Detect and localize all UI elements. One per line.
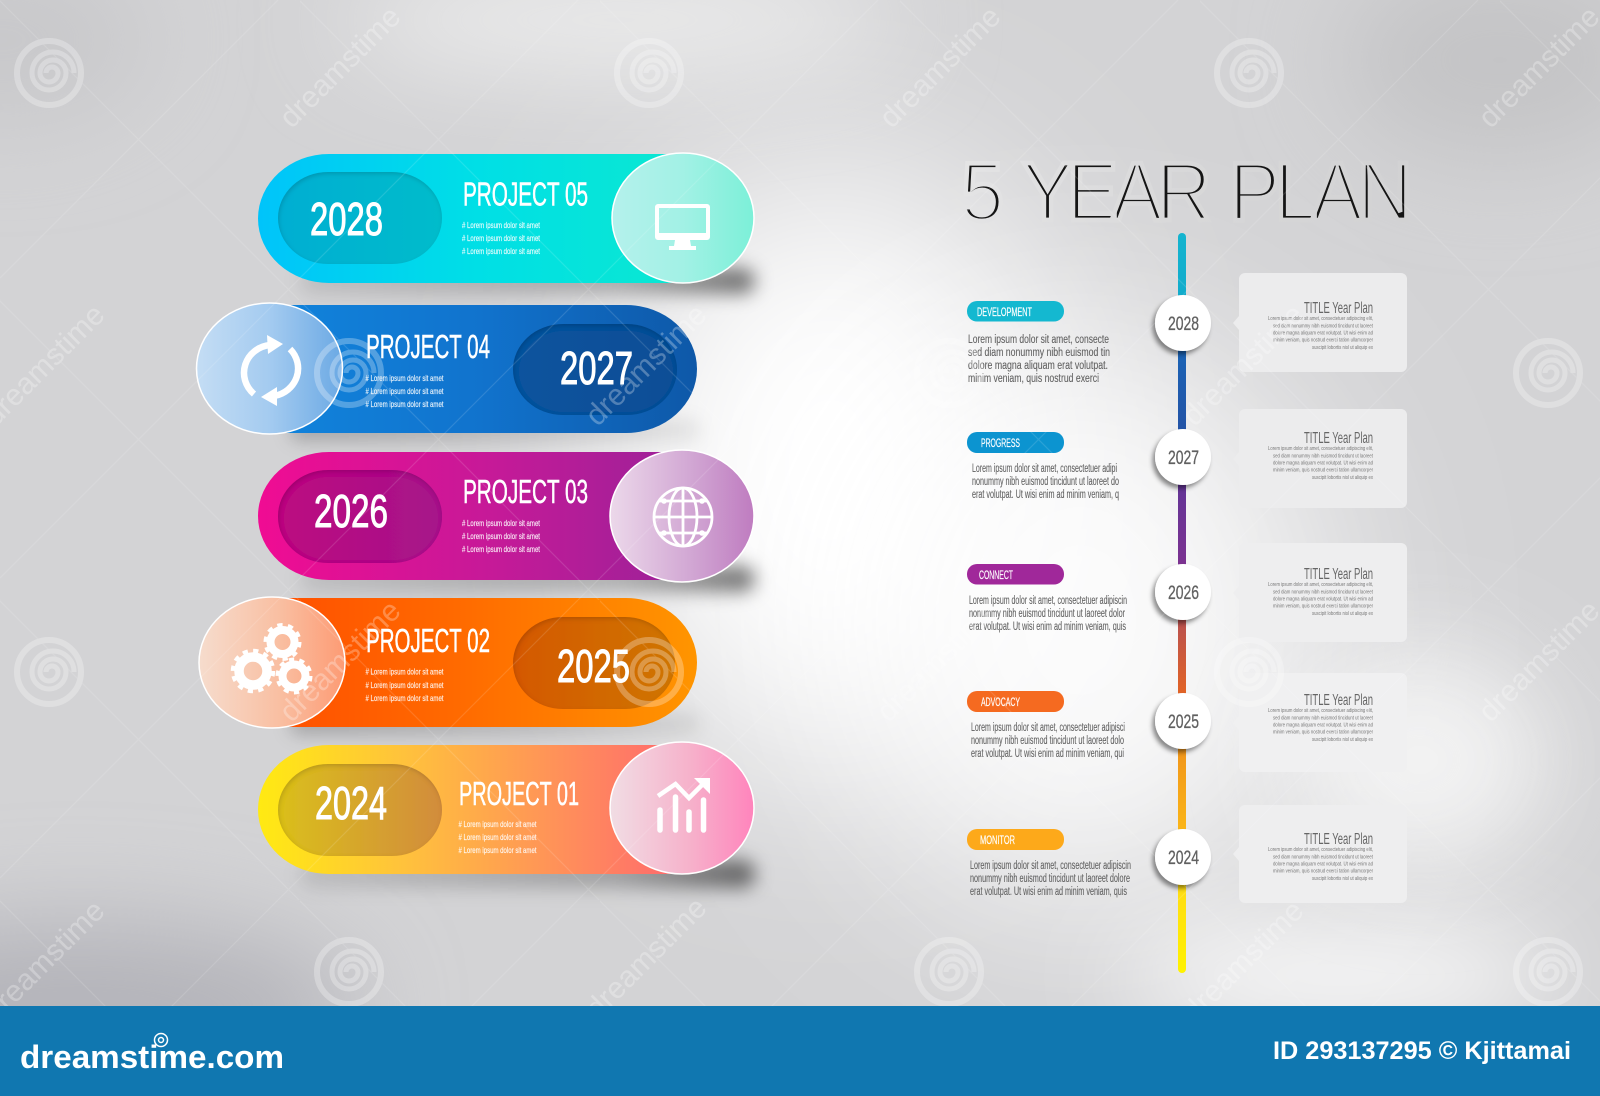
panel: project 01, 2024 <box>258 742 754 874</box>
year 2028: 2028 <box>310 193 383 245</box>
heading project 02: PROJECT 02 <box>366 622 490 659</box>
bullet list: # Lorem ipsum dolor sit amet <box>462 246 540 256</box>
block: progress: erat volutpat. Ut wisi enim ad minim veniam, q <box>972 489 1119 501</box>
block: progress <box>967 432 1119 501</box>
note box 2028: dolore magna aliquam erat volutpat. Ut wisi enim ad <box>1273 330 1373 336</box>
panel: project 02, 2025 <box>199 597 697 728</box>
title <box>961 145 1407 238</box>
note box 2024: suscipit lobortis nisl ut aliquip ex <box>1312 876 1373 882</box>
note box 2026: TITLE Year Plan <box>1304 566 1373 583</box>
bullet list: # Lorem ipsum dolor sit amet <box>366 666 444 676</box>
block: advocacy: Lorem ipsum dolor sit amet, consectetuer adipisci <box>971 722 1125 734</box>
block: connect: Lorem ipsum dolor sit amet, consectetuer adipiscin <box>969 595 1127 607</box>
note box 2027: sed diam nonummy nibh euismod tincidunt ut laoreet <box>1273 453 1373 459</box>
watermark overlay: dreamstime <box>870 594 1004 728</box>
block: monitor <box>967 829 1131 898</box>
block: progress: nonummy nibh euismod tincidunt ut laoreet do <box>972 476 1119 488</box>
note box 2026 <box>1233 543 1407 642</box>
note box 2024: TITLE Year Plan <box>1304 831 1373 848</box>
note box 2025 <box>1233 673 1407 772</box>
note box 2026: sed diam nonummy nibh euismod tincidunt ut laoreet <box>1273 589 1373 595</box>
note box 2025: sed diam nonummy nibh euismod tincidunt ut laoreet <box>1273 715 1373 721</box>
block: connect: CONNECT <box>979 570 1013 582</box>
note box 2025: dolore magna aliquam erat volutpat. Ut wisi enim ad <box>1273 722 1373 728</box>
heading project 05: PROJECT 05 <box>463 176 588 212</box>
note box 2026: dolore magna aliquam erat volutpat. Ut wisi enim ad <box>1273 596 1373 602</box>
note box 2025: Lorem ipsum dolor sit amet, consectetuer adipiscing elit, <box>1268 708 1373 714</box>
block: development: Lorem ipsum dolor sit amet, consecte <box>968 334 1109 346</box>
bullet list <box>366 666 444 703</box>
bullet list: # Lorem ipsum dolor sit amet <box>366 693 444 703</box>
block: connect: nonummy nibh euismod tincidunt ut laoreet dolor <box>969 608 1125 620</box>
note box 2028: minim veniam, quis nostrud exerci tation ullamcorper <box>1273 338 1373 344</box>
watermark overlay: dreamstime <box>1176 894 1310 1028</box>
timeline node 2027: 2027 <box>1168 448 1199 469</box>
watermark overlay: dreamstime <box>873 0 1007 134</box>
note box 2028 <box>1233 273 1407 372</box>
year 2025: 2025 <box>557 640 630 692</box>
bullet list: # Lorem ipsum dolor sit amet <box>366 373 444 383</box>
timeline node 2027 <box>1155 429 1211 485</box>
glass circle <box>196 303 342 434</box>
block: advocacy: nonummy nibh euismod tincidunt ut laoreet dolo <box>971 735 1124 747</box>
timeline node 2026 <box>1155 564 1211 620</box>
watermark overlay: dreamstime <box>579 298 713 432</box>
bullet list: # Lorem ipsum dolor sit amet <box>366 399 444 409</box>
note box 2027: minim veniam, quis nostrud exerci tation ullamcorper <box>1273 468 1373 474</box>
bullet list: # Lorem ipsum dolor sit amet <box>366 680 444 690</box>
heading project 03: PROJECT 03 <box>463 473 588 510</box>
bullet list: # Lorem ipsum dolor sit amet <box>458 819 537 829</box>
note box 2026: Lorem ipsum dolor sit amet, consectetuer adipiscing elit, <box>1268 582 1373 588</box>
note box 2024: dolore magna aliquam erat volutpat. Ut wisi enim ad <box>1273 862 1373 868</box>
year 2026: 2026 <box>314 485 388 537</box>
note box 2028: TITLE Year Plan <box>1304 300 1373 317</box>
panel: project 03, 2026 <box>258 450 754 582</box>
watermark overlay: dreamstime <box>273 0 407 134</box>
icon: globe <box>654 488 712 546</box>
block: development: DEVELOPMENT <box>977 307 1032 319</box>
note box 2027: suscipit lobortis nisl ut aliquip ex <box>1312 475 1373 481</box>
panel: project 04, 2027 <box>196 303 697 434</box>
note box 2025: TITLE Year Plan <box>1304 692 1373 709</box>
icon: sync arrows <box>244 335 298 406</box>
bullet list: # Lorem ipsum dolor sit amet <box>462 220 540 230</box>
icon: gears <box>233 625 310 692</box>
bullet list: # Lorem ipsum dolor sit amet <box>458 845 537 855</box>
block: monitor: nonummy nibh euismod tincidunt ut laoreet dolore <box>970 873 1130 885</box>
title: 5 <box>961 145 1004 238</box>
note box 2026: minim veniam, quis nostrud exerci tation ullamcorper <box>1273 604 1373 610</box>
heading project 01: PROJECT 01 <box>459 775 579 812</box>
bullet list <box>462 220 540 256</box>
title: YEAR <box>1022 145 1209 238</box>
card shadows <box>290 268 755 888</box>
timeline node 2028: 2028 <box>1168 314 1199 335</box>
block: advocacy: erat volutpat. Ut wisi enim ad minim veniam, qui <box>971 748 1124 760</box>
glass circle <box>610 742 754 874</box>
bullet list: # Lorem ipsum dolor sit amet <box>462 518 540 528</box>
note box 2027: dolore magna aliquam erat volutpat. Ut wisi enim ad <box>1273 460 1373 466</box>
note box 2028: Lorem ipsum dolor sit amet, consectetuer adipiscing elit, <box>1268 316 1373 322</box>
glass circle <box>199 597 345 728</box>
block: progress: PROGRESS <box>981 438 1020 450</box>
note box 2027: Lorem ipsum dolor sit amet, consectetuer adipiscing elit, <box>1268 446 1373 452</box>
block: connect: erat volutpat. Ut wisi enim ad minim veniam, quis <box>969 621 1126 633</box>
timeline node 2028 <box>1155 295 1211 351</box>
bullet list: # Lorem ipsum dolor sit amet <box>366 386 444 396</box>
heading project 04: PROJECT 04 <box>366 328 490 365</box>
icon: brand spiral <box>154 1034 168 1046</box>
timeline node 2026: 2026 <box>1168 583 1199 604</box>
note box 2025: suscipit lobortis nisl ut aliquip ex <box>1312 737 1373 743</box>
block: development: dolore magna aliquam erat volutpat. <box>968 360 1108 372</box>
timeline node 2025 <box>1155 693 1211 749</box>
image id credit: ID 293137295 © Kjittamai <box>1273 1037 1571 1065</box>
note box 2028: suscipit lobortis nisl ut aliquip ex <box>1312 345 1373 351</box>
title: PLAN <box>1229 145 1407 238</box>
note box 2024: Lorem ipsum dolor sit amet, consectetuer adipiscing elit, <box>1268 847 1373 853</box>
icon: growth chart <box>658 778 710 830</box>
year 2027: 2027 <box>560 342 633 394</box>
glass circle <box>610 450 754 582</box>
bullet list: # Lorem ipsum dolor sit amet <box>458 832 537 842</box>
bullet list: # Lorem ipsum dolor sit amet <box>462 233 540 243</box>
block: connect <box>967 564 1127 633</box>
bullet list <box>458 819 537 855</box>
panel: project 05, 2028 <box>258 153 754 283</box>
footer banner <box>0 1006 1600 1096</box>
block: advocacy: ADVOCACY <box>981 697 1020 709</box>
bullet list: # Lorem ipsum dolor sit amet <box>462 544 540 554</box>
bullet list <box>462 518 540 554</box>
note box 2024: sed diam nonummy nibh euismod tincidunt ut laoreet <box>1273 854 1373 860</box>
watermark overlay: dreamstime <box>579 891 713 1025</box>
block: progress: Lorem ipsum dolor sit amet, consectetuer adipi <box>972 463 1117 475</box>
block: monitor: erat volutpat. Ut wisi enim ad minim veniam, quis <box>970 886 1127 898</box>
timeline node 2024 <box>1155 829 1211 885</box>
note box 2026: suscipit lobortis nisl ut aliquip ex <box>1312 611 1373 617</box>
icon: monitor <box>655 204 710 250</box>
block: development: sed diam nonummy nibh euismod tin <box>968 347 1110 359</box>
glass circle <box>612 153 754 283</box>
timeline bar <box>1178 233 1186 973</box>
brand wordmark: dreamstime.com <box>20 1039 284 1075</box>
block: development <box>967 301 1110 385</box>
bullet list <box>366 373 444 409</box>
note box 2024: minim veniam, quis nostrud exerci tation ullamcorper <box>1273 869 1373 875</box>
watermark overlay: dreamstime <box>273 594 407 728</box>
note box 2028: sed diam nonummy nibh euismod tincidunt ut laoreet <box>1273 323 1373 329</box>
watermark overlay: dreamstime <box>1176 298 1310 432</box>
block: monitor: MONITOR <box>980 835 1015 847</box>
timeline node 2025: 2025 <box>1168 712 1199 733</box>
bullet list: # Lorem ipsum dolor sit amet <box>462 531 540 541</box>
note box 2025: minim veniam, quis nostrud exerci tation ullamcorper <box>1273 730 1373 736</box>
timeline node 2024: 2024 <box>1168 848 1199 869</box>
block: development: minim veniam, quis nostrud exerci <box>968 373 1099 385</box>
note box 2027: TITLE Year Plan <box>1304 430 1373 447</box>
note box 2024 <box>1233 805 1407 903</box>
note box 2027 <box>1233 409 1407 508</box>
year 2024: 2024 <box>315 777 387 829</box>
block: monitor: Lorem ipsum dolor sit amet, consectetuer adipiscin <box>970 860 1131 872</box>
block: advocacy <box>967 691 1125 760</box>
